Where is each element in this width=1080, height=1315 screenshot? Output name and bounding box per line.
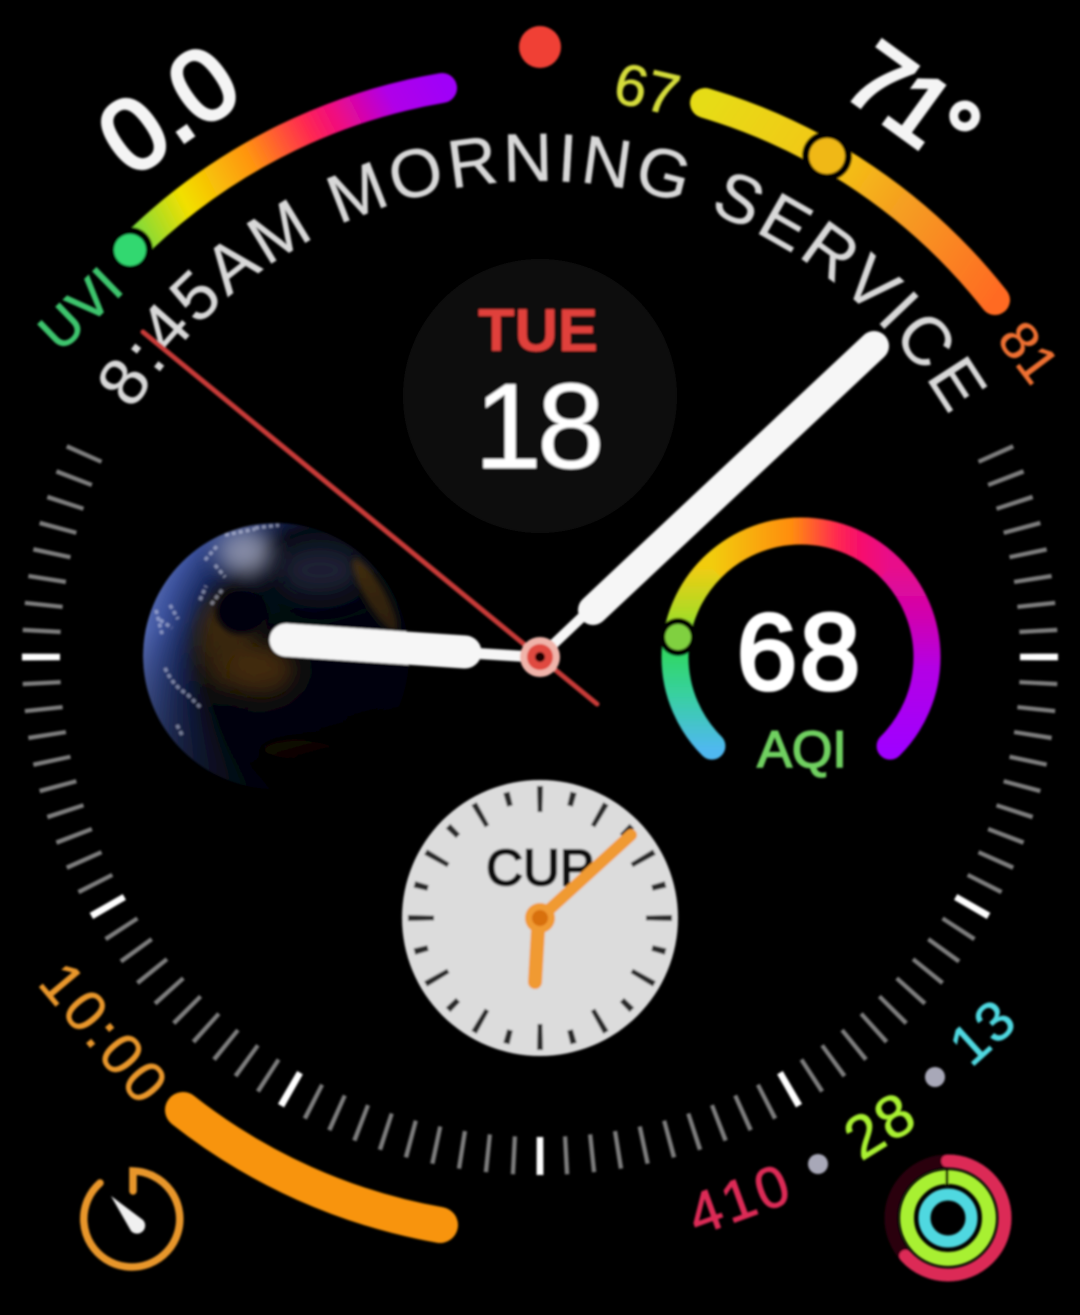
activity metrics: 28 [833,1078,928,1173]
curved calendar event text: 8:45AM MORNING SERVICE [98,132,988,414]
red status dot [519,26,561,68]
air quality gauge [659,531,927,779]
activity metrics: 13 [937,986,1028,1077]
analog cup dial [402,780,678,1056]
minute tick ring [20,443,1060,1177]
UV index gauge: 0.0 [78,22,259,197]
minute hand [540,346,874,657]
UV index gauge: UVI [28,256,134,362]
icon: timer [84,1171,180,1267]
hour hand [286,640,535,657]
second hand [143,332,597,704]
analog cup dial: CUP [486,839,594,896]
temperature gauge: 71° [827,22,995,185]
timer gauge [27,950,440,1225]
timer gauge: 10:00 [27,950,183,1118]
date complication [403,259,677,533]
activity metrics [679,986,1028,1248]
temperature gauge: 67 [608,51,686,128]
activity metrics: 410 [679,1151,801,1248]
date complication: TUE [478,297,598,364]
air quality gauge: AQI [757,721,847,779]
temperature gauge: 81 [986,311,1070,395]
UV index gauge [28,22,442,362]
earth complication [143,523,409,789]
air quality gauge: 68 [737,591,863,712]
date complication: 18 [474,358,600,494]
activity rings [891,1161,1005,1275]
center pivot [520,637,560,677]
temperature gauge [608,22,1070,395]
